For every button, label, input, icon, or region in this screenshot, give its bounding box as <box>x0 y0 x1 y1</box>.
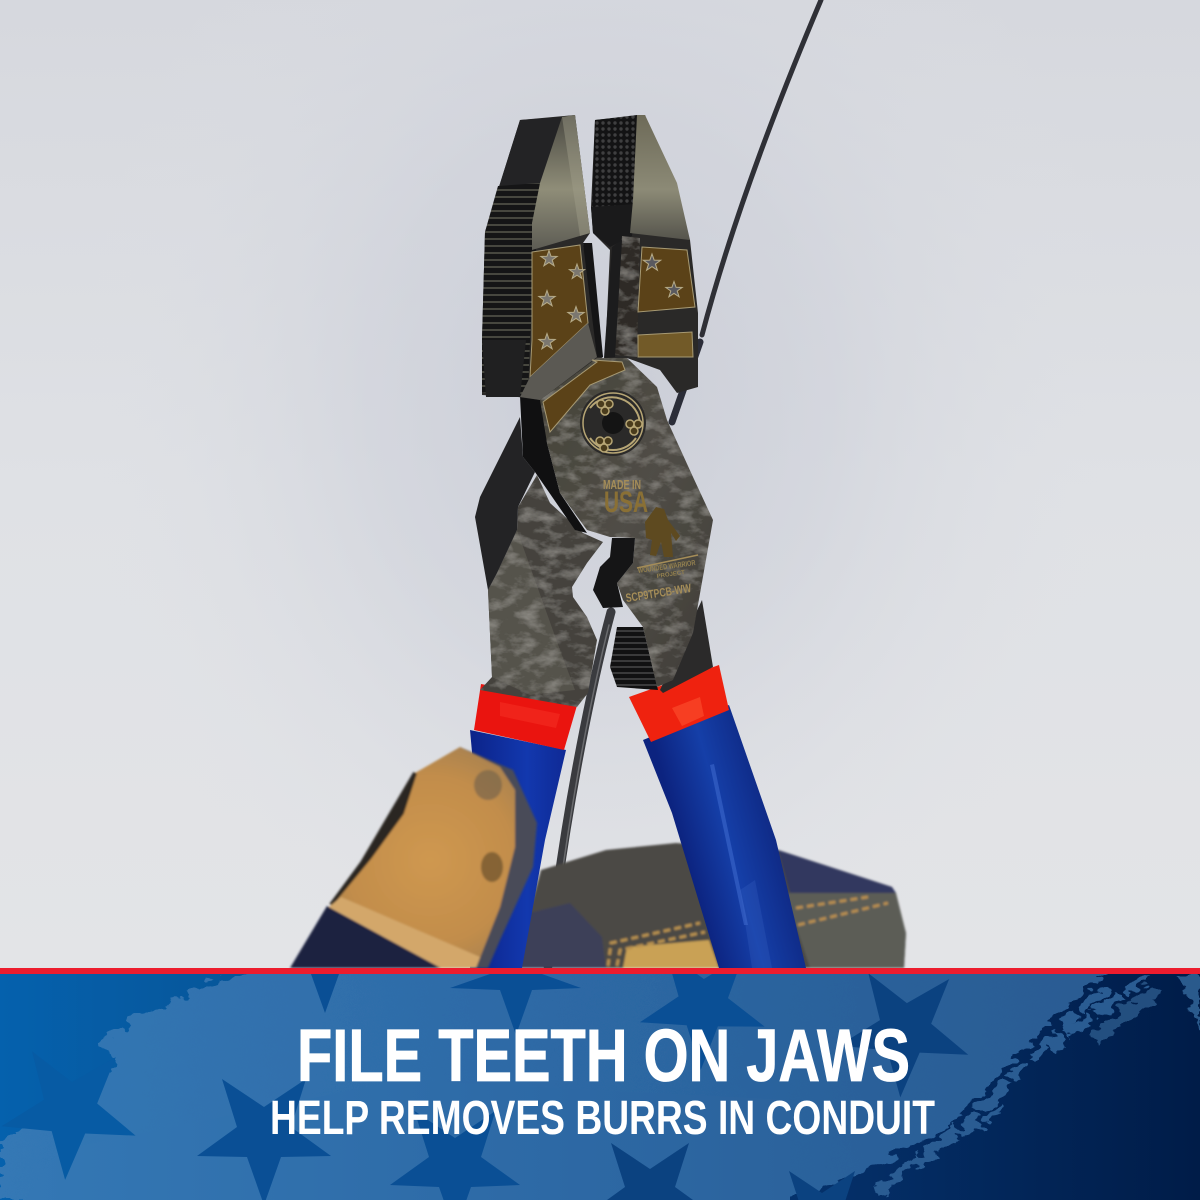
upper left lower steel <box>520 323 597 400</box>
paint fill along bottom edge <box>40 1193 790 1200</box>
upper left flag field <box>530 245 588 377</box>
left handle <box>470 684 578 968</box>
right jaw dark underlay <box>591 115 698 393</box>
title: FILE TEETH ON JAWS <box>297 1014 910 1097</box>
black pivot hook <box>593 538 635 608</box>
gloved hand behind handles <box>519 843 906 968</box>
bottom banner <box>0 951 1200 1200</box>
lower right black neck <box>660 600 713 693</box>
glove thumb <box>290 747 537 968</box>
upper left teeth highlight <box>562 115 590 236</box>
upper right flag field <box>638 247 695 312</box>
wounded warrior text <box>625 555 698 605</box>
lower right knurled inner jaw <box>610 627 658 690</box>
lower left black grip <box>475 417 535 590</box>
lower left jaw highlight side <box>488 530 575 695</box>
upper left black strip <box>583 243 603 357</box>
upper right flag stars <box>643 254 682 297</box>
subtitle: HELP REMOVES BURRS IN CONDUIT <box>270 1092 935 1145</box>
right handle <box>629 665 806 968</box>
soldier silhouette mark <box>645 507 680 557</box>
upper left black grip top <box>498 117 562 223</box>
red divider <box>0 968 1200 974</box>
upper right black chisel <box>591 204 635 247</box>
upper right steel face <box>630 115 690 240</box>
made in usa mark: USA <box>604 486 648 519</box>
wire <box>548 0 821 966</box>
made in usa mark <box>603 477 648 519</box>
engraved rivet logo <box>580 390 646 456</box>
wounded warrior text: WOUNDED WARRIOR <box>637 558 696 575</box>
lower left jaw steel <box>480 475 603 707</box>
wounded warrior text: SCP9TPCB-WW <box>625 581 693 605</box>
brush paint texture <box>0 951 1200 1200</box>
made in usa mark: MADE IN <box>603 477 641 492</box>
upper left flag stars <box>539 250 585 349</box>
gap strip between jaws <box>604 240 622 358</box>
upper right rusty block <box>615 236 640 357</box>
left jaw dark underlay <box>482 115 603 400</box>
banner stars <box>2 974 968 1200</box>
engraved wave <box>543 360 625 432</box>
pivot black block <box>520 396 587 533</box>
upper left knurled grip <box>482 183 540 397</box>
upper left grip base <box>482 340 526 397</box>
upper right knurled inner face <box>592 115 637 207</box>
central plate <box>540 358 713 687</box>
pliers <box>475 115 713 707</box>
upper right stripe <box>638 332 693 357</box>
upper left steel face <box>532 115 590 250</box>
wounded warrior text: PROJECT <box>656 570 686 580</box>
